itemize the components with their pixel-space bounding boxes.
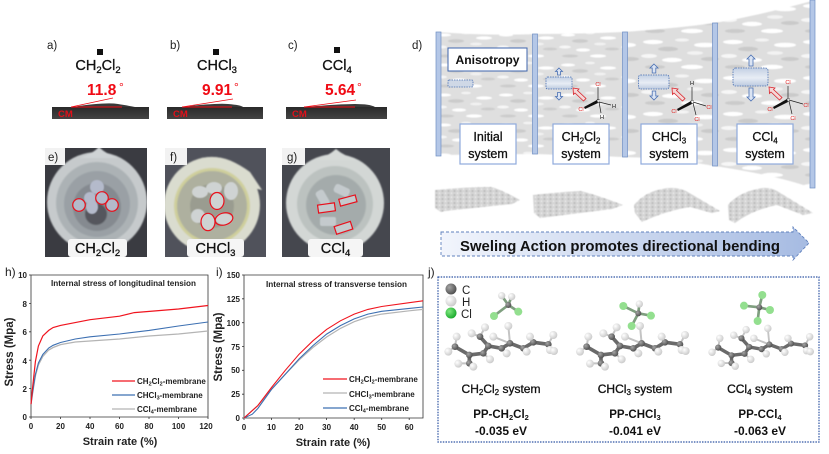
x tick labels: 60	[405, 423, 414, 432]
label a: a)	[47, 40, 57, 52]
adsorption pair names: 3	[657, 413, 661, 422]
y tick labels: 8	[23, 300, 28, 309]
system captions: 3	[626, 388, 631, 397]
adsorption pair names: 2	[509, 413, 513, 422]
legend: -membrane	[154, 405, 198, 414]
label e: e)	[48, 152, 58, 164]
curve CH2Cl2	[244, 301, 423, 418]
system captions: system	[499, 382, 540, 396]
marker square	[213, 49, 219, 55]
adsorption energies: -0.035 eV	[475, 424, 527, 438]
pore CH2Cl2	[546, 77, 572, 89]
y tick labels: 25	[231, 390, 241, 399]
membrane texture	[437, 1, 812, 188]
panel: contact angle b: °	[234, 80, 239, 94]
legend: -membrane	[372, 390, 415, 399]
substrate with droplet: CM	[292, 109, 307, 120]
adsorption pair names	[473, 409, 782, 422]
molecule CHCl3	[671, 81, 712, 123]
system 3 molecules	[708, 291, 814, 370]
x tick labels	[242, 423, 414, 432]
legend: 4	[151, 410, 155, 416]
y tick labels: 10	[18, 271, 28, 280]
substrate with droplet: CM	[173, 109, 188, 120]
x tick labels: 30	[322, 423, 332, 432]
y tick labels: 0	[23, 413, 28, 422]
formula CH2Cl2: 2	[115, 65, 121, 76]
axis titles: Strain rate (%)	[296, 437, 371, 449]
x tick labels: 120	[199, 422, 213, 431]
system captions: CHCl	[598, 382, 626, 396]
y tick labels: 4	[23, 357, 28, 366]
adsorption pair names: Cl	[513, 409, 525, 421]
y tick labels: 50	[231, 366, 241, 375]
adsorption pair names: PP-CHCl	[609, 409, 657, 421]
solvent tag: CH	[75, 241, 96, 257]
red markers	[318, 195, 357, 234]
arrow banner: Sweling Action promotes directional bending	[460, 238, 780, 255]
panel: contact angle c: °	[357, 80, 362, 94]
formula CH2Cl2: Cl	[102, 58, 115, 74]
clamp bars	[436, 0, 815, 188]
molecule CCl4: Cl	[803, 103, 809, 109]
system box CH2Cl2: Cl	[584, 130, 596, 144]
molecule CHCl3: H	[690, 81, 694, 87]
chart title: Internal stress of longitudinal tension	[51, 279, 196, 288]
molecule CHCl3: Cl	[694, 117, 700, 123]
molecule CH2Cl2: H	[600, 115, 604, 121]
immersed pieces	[73, 180, 118, 214]
bent membrane models	[435, 187, 813, 223]
atom legend	[446, 284, 472, 321]
system box CH2Cl2: system	[561, 147, 601, 161]
label i: i)	[216, 265, 223, 279]
x tick labels: 40	[86, 422, 95, 431]
anisotropy label: Anisotropy	[456, 55, 520, 67]
axes frame	[31, 275, 208, 417]
system captions: system	[631, 382, 672, 396]
adsorption pair names: PP-CH	[473, 409, 509, 421]
solvent tag: 2	[115, 248, 120, 259]
system captions: CCl	[727, 382, 747, 396]
solvent tag: 3	[230, 248, 235, 259]
y tick labels	[227, 271, 241, 423]
solvent tag: 4	[345, 248, 350, 259]
x tick labels: 0	[242, 423, 247, 432]
system box CH2Cl2: 2	[596, 136, 601, 146]
curve CHCl3	[244, 309, 423, 418]
chart: longitudinal tension: Stress (Mpa)	[4, 317, 16, 387]
system box CHCl3	[641, 124, 697, 164]
formula CCl4: 4	[346, 65, 352, 76]
immersed pieces	[315, 183, 357, 234]
curve CCl4	[244, 307, 423, 418]
marker square	[334, 47, 340, 53]
label f: f)	[170, 152, 177, 164]
legend: 2	[160, 382, 163, 388]
system box CH2Cl2: CH	[562, 130, 580, 144]
molecule CCl4: Cl	[790, 116, 796, 122]
curve CH2Cl2	[31, 306, 208, 404]
panel: contact angle a: °	[119, 80, 124, 94]
formula CHCl3: CHCl	[197, 58, 232, 74]
system captions: 2	[479, 388, 484, 397]
y tick labels: 150	[227, 271, 241, 280]
system 2 molecules	[576, 300, 690, 371]
curve CCl4	[31, 331, 208, 404]
molecule CCl4: Cl	[767, 107, 773, 113]
molecule CHCl3: Cl	[671, 109, 677, 115]
x tick labels: 80	[145, 422, 154, 431]
adsorption energies	[475, 424, 786, 438]
molecule CH2Cl2: Cl	[595, 82, 601, 88]
x tick labels: 0	[29, 422, 34, 431]
molecule CCl4	[767, 80, 809, 122]
x tick labels: 60	[115, 422, 124, 431]
chart: transverse tension	[213, 271, 423, 449]
legend	[323, 375, 418, 414]
axis titles: Strain rate (%)	[83, 436, 158, 448]
solvent tag: 2	[96, 248, 101, 259]
photo panel g	[282, 148, 390, 259]
panel j: adsorption energy box	[438, 277, 819, 442]
molecule CH2Cl2: C	[596, 99, 600, 105]
molecule CHCl3: Cl	[706, 105, 712, 111]
label j: j)	[427, 265, 435, 279]
legend: -membrane	[375, 375, 418, 384]
y tick labels: 125	[227, 295, 241, 304]
x tick labels: 20	[295, 423, 304, 432]
legend: CHCl	[349, 390, 369, 399]
angle value: 9.91	[202, 82, 233, 99]
system box CCl4	[737, 124, 793, 164]
legend: CCl	[349, 404, 363, 413]
system box CCl4: system	[745, 147, 785, 161]
molecule CCl4: Cl	[785, 80, 791, 86]
y tick labels: 100	[227, 319, 241, 328]
panel: contact angle a	[47, 40, 149, 120]
solvent tag	[308, 239, 363, 259]
legend: CH	[349, 375, 361, 384]
legend: 2	[149, 382, 152, 388]
solvent tag	[187, 239, 244, 259]
panel: membrane swelling schematic	[436, 0, 815, 188]
adsorption pair names: 2	[525, 413, 529, 422]
formula CCl4: CCl	[322, 58, 346, 74]
system 1 molecules	[444, 292, 558, 371]
x tick labels: 20	[56, 422, 65, 431]
pore CHCl3	[638, 75, 669, 89]
system captions: 4	[747, 388, 752, 397]
molecule CH2Cl2: H	[612, 104, 616, 110]
formula CH2Cl2: CH	[75, 58, 96, 74]
photo panel e	[45, 147, 147, 259]
system box CHCl3: system	[649, 147, 689, 161]
legend: -membrane	[366, 404, 410, 413]
legend: CHCl	[137, 391, 157, 400]
marker square	[97, 49, 103, 55]
adsorption pair names: 4	[777, 413, 782, 422]
curve CHCl3	[31, 322, 208, 404]
adsorption pair names: PP-CCl	[738, 409, 777, 421]
expansion arrows	[556, 55, 755, 101]
y tick labels: 6	[23, 328, 28, 337]
pore initial	[448, 80, 473, 87]
legend: 3	[157, 396, 160, 402]
axes frame	[244, 275, 423, 418]
red markers	[73, 192, 118, 211]
panel: contact angle b	[167, 40, 263, 120]
label g: g)	[287, 152, 297, 164]
legend: 2	[361, 380, 364, 386]
molecule CHCl3: C	[690, 100, 694, 106]
x tick labels: 40	[350, 423, 359, 432]
legend: Cl	[364, 375, 372, 384]
chart: longitudinal tension	[4, 271, 213, 448]
system box CH2Cl2	[553, 124, 609, 164]
adsorption energies: -0.041 eV	[609, 424, 661, 438]
arrow banner	[441, 227, 809, 260]
system box CCl4: CCl	[752, 130, 773, 144]
system captions: 2	[495, 388, 500, 397]
legend	[112, 377, 206, 416]
legend: -membrane	[163, 377, 206, 386]
system box CHCl3: 3	[682, 136, 687, 146]
substrate with droplet: CM	[58, 109, 73, 120]
angle value: 5.64	[325, 82, 356, 99]
molecule CH2Cl2	[578, 82, 616, 121]
formula CHCl3: 3	[232, 65, 237, 76]
label d: d)	[412, 40, 422, 52]
x tick labels: 100	[172, 422, 186, 431]
y tick labels: 2	[23, 385, 28, 394]
molecule CCl4: C	[786, 98, 790, 104]
solvent tag	[68, 239, 127, 259]
system box CHCl3: CHCl	[652, 130, 682, 144]
anisotropy label	[448, 48, 527, 71]
legend: -membrane	[160, 391, 203, 400]
immersed pieces	[191, 182, 238, 230]
legend: 4	[363, 408, 367, 414]
system captions	[462, 382, 793, 397]
solvent entry arrows	[573, 87, 782, 101]
chart: transverse tension: Stress (Mpa)	[213, 312, 225, 382]
legend: Cl	[152, 377, 160, 386]
label c: c)	[288, 40, 298, 52]
x tick labels: 10	[267, 423, 276, 432]
label b: b)	[170, 40, 180, 52]
label h: h)	[5, 265, 16, 279]
x tick labels: 50	[377, 423, 387, 432]
system box initial: Initial	[473, 130, 503, 144]
red markers	[201, 192, 234, 231]
photo panel f	[164, 148, 266, 259]
formula CH2Cl2: 2	[96, 65, 102, 76]
molecule CH2Cl2: Cl	[578, 107, 584, 113]
system captions: Cl	[483, 382, 495, 396]
angle value: 11.8	[87, 82, 117, 99]
legend: 3	[369, 394, 372, 400]
solvent tag: CCl	[321, 241, 345, 257]
atom legend: Cl	[461, 309, 472, 321]
panel: contact angle c	[286, 40, 387, 120]
system captions: system	[752, 382, 793, 396]
legend: 2	[372, 380, 375, 386]
y tick labels: 0	[236, 414, 241, 423]
y tick labels: 75	[231, 343, 241, 352]
solvent tag: Cl	[101, 241, 115, 257]
chart title: Internal stress of transverse tension	[266, 280, 407, 289]
adsorption energies: -0.063 eV	[734, 424, 786, 438]
system captions: CH	[462, 382, 479, 396]
system box initial: system	[468, 147, 508, 161]
y tick labels	[18, 271, 28, 422]
legend: CCl	[137, 405, 151, 414]
atom legend: H	[462, 297, 470, 309]
legend: CH	[137, 377, 149, 386]
solvent tag: CHCl	[196, 241, 230, 257]
system box initial	[460, 124, 516, 164]
system box CCl4: 4	[773, 136, 778, 146]
system box CH2Cl2: 2	[580, 136, 585, 146]
atom legend: C	[462, 285, 470, 297]
pore CCl4	[733, 68, 768, 86]
x tick labels	[29, 422, 213, 431]
